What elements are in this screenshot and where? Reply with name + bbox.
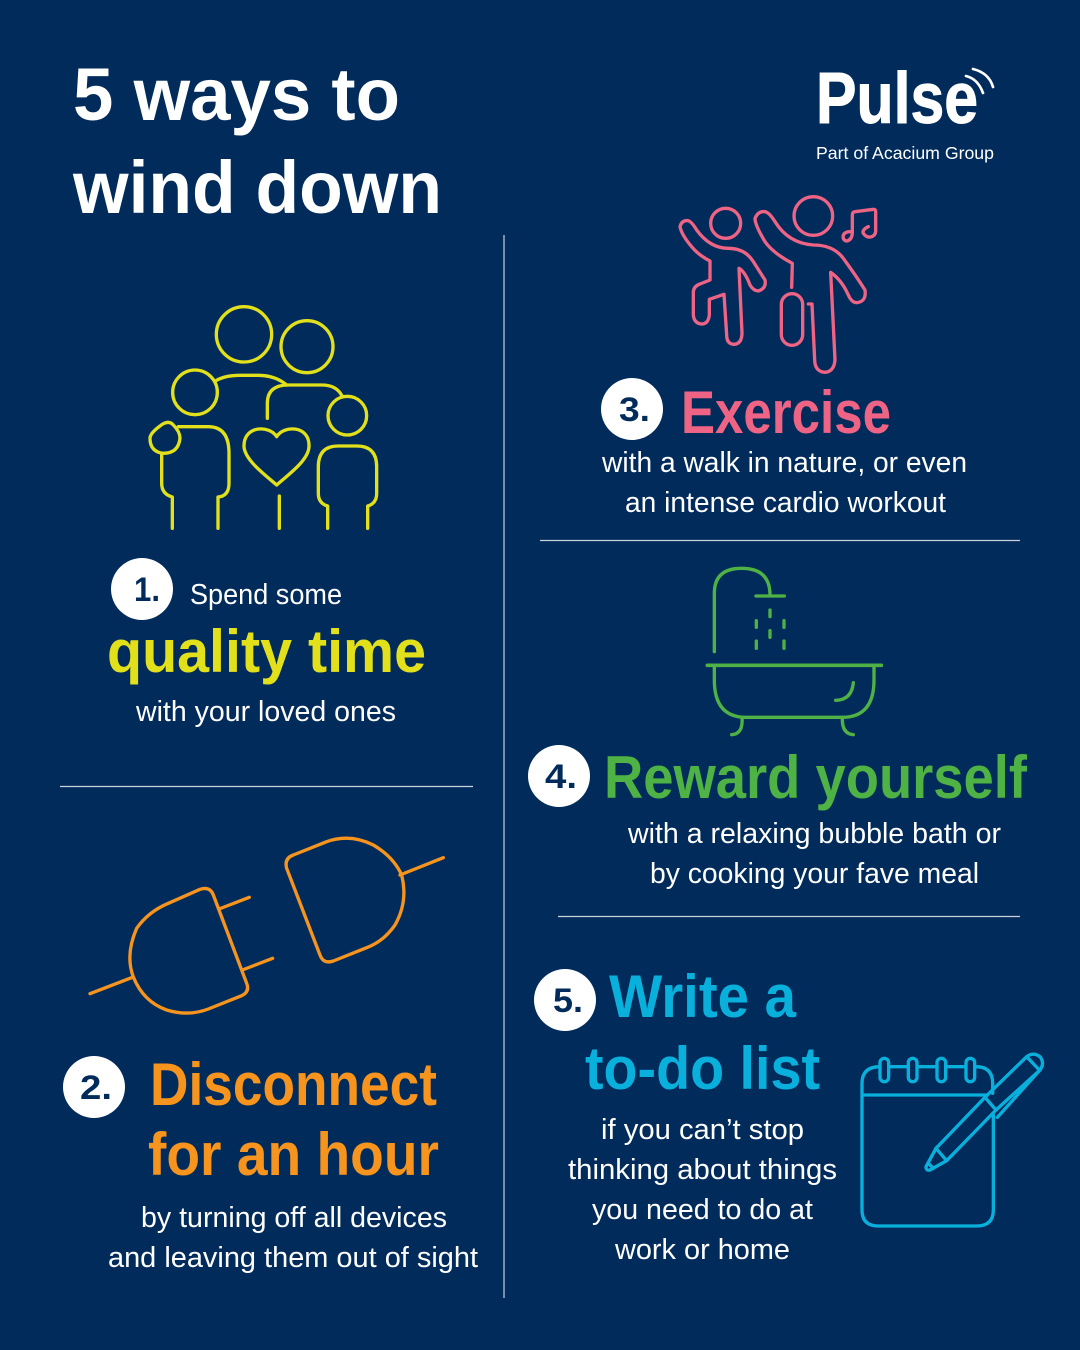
number badge 2 (63, 1056, 125, 1118)
item 2: disconnect: for an hour (148, 1121, 439, 1188)
item 5: to-do list: Write a (609, 963, 797, 1030)
item 5: to-do list: thinking about things (568, 1154, 837, 1186)
item 1: quality time (107, 558, 426, 728)
item 2: disconnect: and leaving them out of sight (108, 1242, 478, 1274)
item 4: reward yourself (528, 744, 1028, 890)
number badge 2: 2. (80, 1069, 112, 1107)
title: 5 ways to (73, 53, 400, 136)
item 2: disconnect: Disconnect (150, 1051, 437, 1118)
number badge 5 (534, 969, 596, 1031)
item 1: quality time: with your loved ones (135, 696, 396, 728)
item 5: to-do list: work or home (614, 1234, 790, 1266)
icon: dancing figures (680, 197, 876, 372)
item 4: reward yourself: by cooking your fave meal (650, 858, 979, 890)
item 4: reward yourself: with a relaxing bubble bath or (627, 818, 1001, 850)
item 1: quality time: Spend some (190, 579, 342, 611)
item 1: quality time: quality time (107, 618, 426, 685)
number badge 3: 3. (619, 391, 650, 429)
icon: family (150, 307, 377, 528)
icon: plug and socket (90, 838, 443, 1013)
item 5: to-do list (534, 963, 837, 1266)
item 5: to-do list: you need to do at (592, 1194, 813, 1226)
number badge 1 (111, 558, 173, 620)
title (72, 53, 442, 229)
item 5: to-do list: if you can’t stop (601, 1114, 804, 1146)
item 3: exercise: with a walk in nature, or even (601, 447, 967, 479)
item 4: reward yourself: Reward yourself (604, 744, 1028, 811)
item 2: disconnect: by turning off all devices (141, 1202, 447, 1234)
item 3: exercise (601, 378, 967, 519)
item 3: exercise: Exercise (681, 379, 891, 446)
number badge 4: 4. (545, 758, 577, 796)
icon: bathtub (707, 568, 881, 735)
logo: Pulse: Part of Acacium Group (816, 143, 994, 163)
title: wind down (72, 146, 442, 229)
item 3: exercise: an intense cardio workout (625, 487, 946, 519)
item 2: disconnect (63, 1051, 478, 1274)
icon: notepad and pen (862, 1054, 1042, 1226)
number badge 1: 1. (134, 571, 160, 609)
number badge 4 (528, 745, 590, 807)
number badge 3 (601, 378, 663, 440)
logo: Pulse: Pulse (816, 59, 978, 139)
item 5: to-do list: to-do list (585, 1035, 820, 1102)
number badge 5: 5. (553, 982, 583, 1020)
